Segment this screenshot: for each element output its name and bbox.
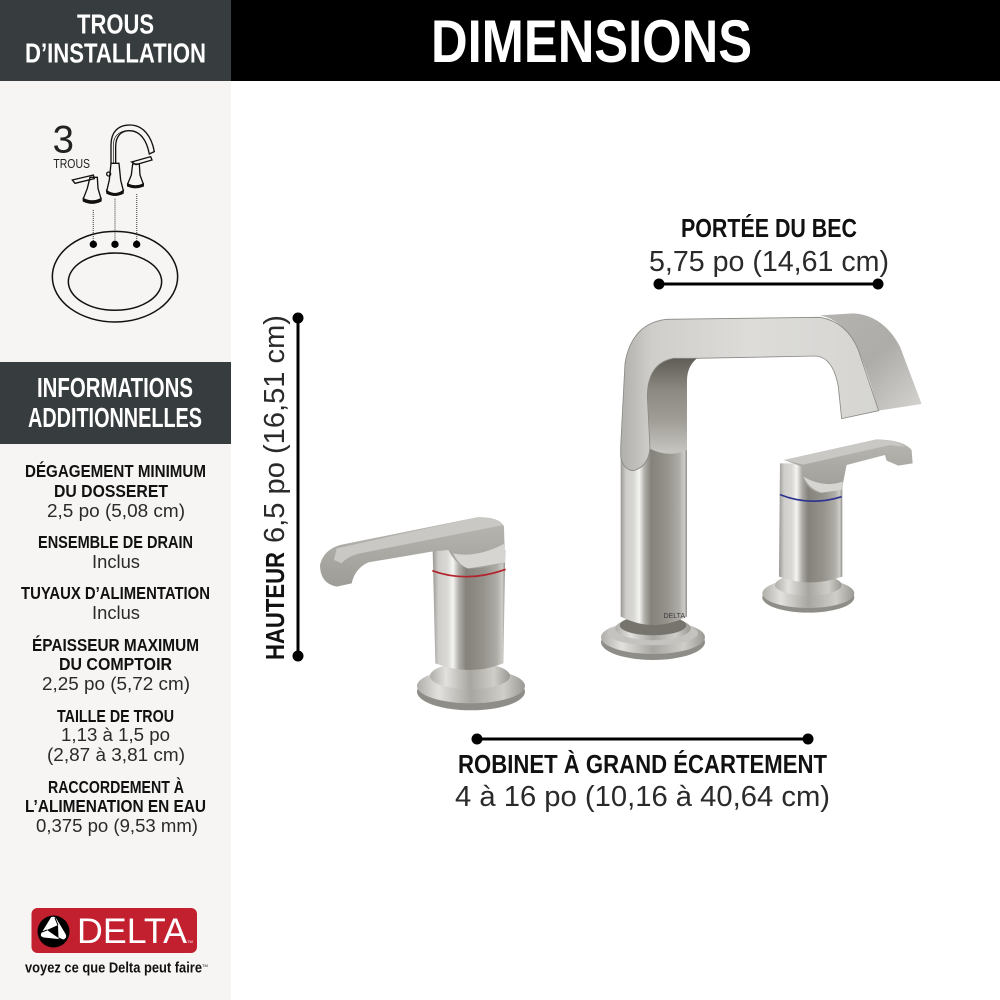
text block: taille de trou: 1,13 à 1,5 po	[61, 724, 170, 745]
right handle body	[779, 463, 842, 582]
spout inner curve	[647, 357, 698, 454]
text block: dégagement minimum: 2,5 po (5,08 cm)	[47, 500, 185, 521]
text block: ensemble de drain: Inclus	[92, 551, 140, 572]
spout arm	[621, 317, 879, 471]
left handle body	[433, 550, 505, 670]
text block: dégagement minimum: DÉGAGEMENT MINIMUM	[25, 460, 206, 481]
heading: trous d'installation	[0, 0, 231, 81]
text block: épaisseur maximum: DU COMPTOIR	[59, 654, 172, 674]
title banner: dimensions: DIMENSIONS	[431, 8, 752, 75]
text block: tuyaux d'alimentation: Inclus	[92, 602, 140, 623]
label: 3 trous: TROUS	[53, 157, 90, 171]
heading: informations additionnelles: ADDITIONNELLES	[28, 402, 202, 433]
label: 3 trous: 3	[53, 119, 74, 162]
text block: taille de trou: (2,87 à 3,81 cm)	[47, 744, 185, 765]
heading: informations additionnelles	[0, 362, 231, 444]
text block: raccordement: 0,375 po (9,53 mm)	[36, 815, 198, 836]
text block: raccordement: L’ALIMENATION EN EAU	[25, 796, 206, 816]
text block: tuyaux d'alimentation: TUYAUX D’ALIMENTATION	[21, 583, 210, 603]
heading: informations additionnelles: INFORMATIONS	[37, 372, 193, 403]
left handle base	[417, 663, 525, 710]
photo: faucet spout and right handle	[601, 313, 922, 660]
dimension: robinet à grand écartement: 4 à 16 po (10,16 à 40,64 cm)	[455, 781, 830, 813]
dimension: portée du bec	[649, 213, 889, 290]
text block: raccordement	[25, 776, 206, 836]
icon: three-hole faucet and sink diagram	[52, 119, 178, 322]
delta mark: DELTA	[664, 611, 685, 620]
text block: épaisseur maximum	[32, 634, 199, 694]
panel: sidebar background	[0, 0, 231, 1000]
dimension: portée du bec: 5,75 po (14,61 cm)	[649, 246, 889, 278]
dimension: hauteur	[259, 312, 304, 662]
spout base	[601, 615, 705, 660]
text block: ensemble de drain	[38, 532, 193, 572]
right handle base	[762, 574, 854, 613]
text block: tuyaux d'alimentation	[21, 583, 210, 623]
dimension: robinet à grand écartement: ROBINET À GRAND ÉCARTEMENT	[458, 749, 827, 779]
logo: delta: TM	[187, 939, 193, 944]
dimension: hauteur: 6,5 po (16,51 cm)	[259, 315, 291, 543]
icon: left handle	[72, 175, 101, 203]
logo: delta: TM	[202, 963, 208, 968]
logo: delta: DELTA	[77, 912, 188, 951]
dimension: robinet à grand écartement	[455, 734, 830, 813]
text block: raccordement: RACCORDEMENT À	[48, 776, 184, 797]
left handle red ring	[432, 569, 506, 577]
title banner: dimensions	[231, 0, 1000, 81]
text block: dégagement minimum	[25, 460, 206, 521]
label: 3 trous	[53, 119, 90, 171]
heading: trous d'installation: D’INSTALLATION	[25, 38, 206, 68]
text block: épaisseur maximum: ÉPAISSEUR MAXIMUM	[32, 634, 199, 655]
text block: épaisseur maximum: 2,25 po (5,72 cm)	[42, 673, 190, 694]
right handle blue ring	[780, 495, 842, 501]
text block: taille de trou	[47, 706, 185, 765]
left handle lever	[320, 517, 505, 587]
icon: centre spout	[107, 125, 154, 195]
logo: delta	[25, 908, 208, 976]
spout tip	[820, 313, 922, 411]
text block: taille de trou: TAILLE DE TROU	[57, 706, 174, 726]
icon: sink basin	[52, 231, 178, 322]
dimension: portée du bec: PORTÉE DU BEC	[681, 213, 857, 243]
text block: ensemble de drain: ENSEMBLE DE DRAIN	[38, 532, 193, 552]
text block: dégagement minimum: DU DOSSERET	[54, 481, 168, 501]
dimension: hauteur: HAUTEUR	[260, 552, 290, 660]
right handle lever	[784, 439, 913, 493]
logo: delta: voyez ce que Delta peut faire	[25, 960, 202, 976]
spout body	[621, 447, 687, 625]
heading: trous d'installation: TROUS	[77, 8, 154, 40]
icon: right handle	[128, 157, 152, 188]
photo: left handle	[320, 517, 525, 710]
dotted drop lines	[93, 194, 137, 242]
